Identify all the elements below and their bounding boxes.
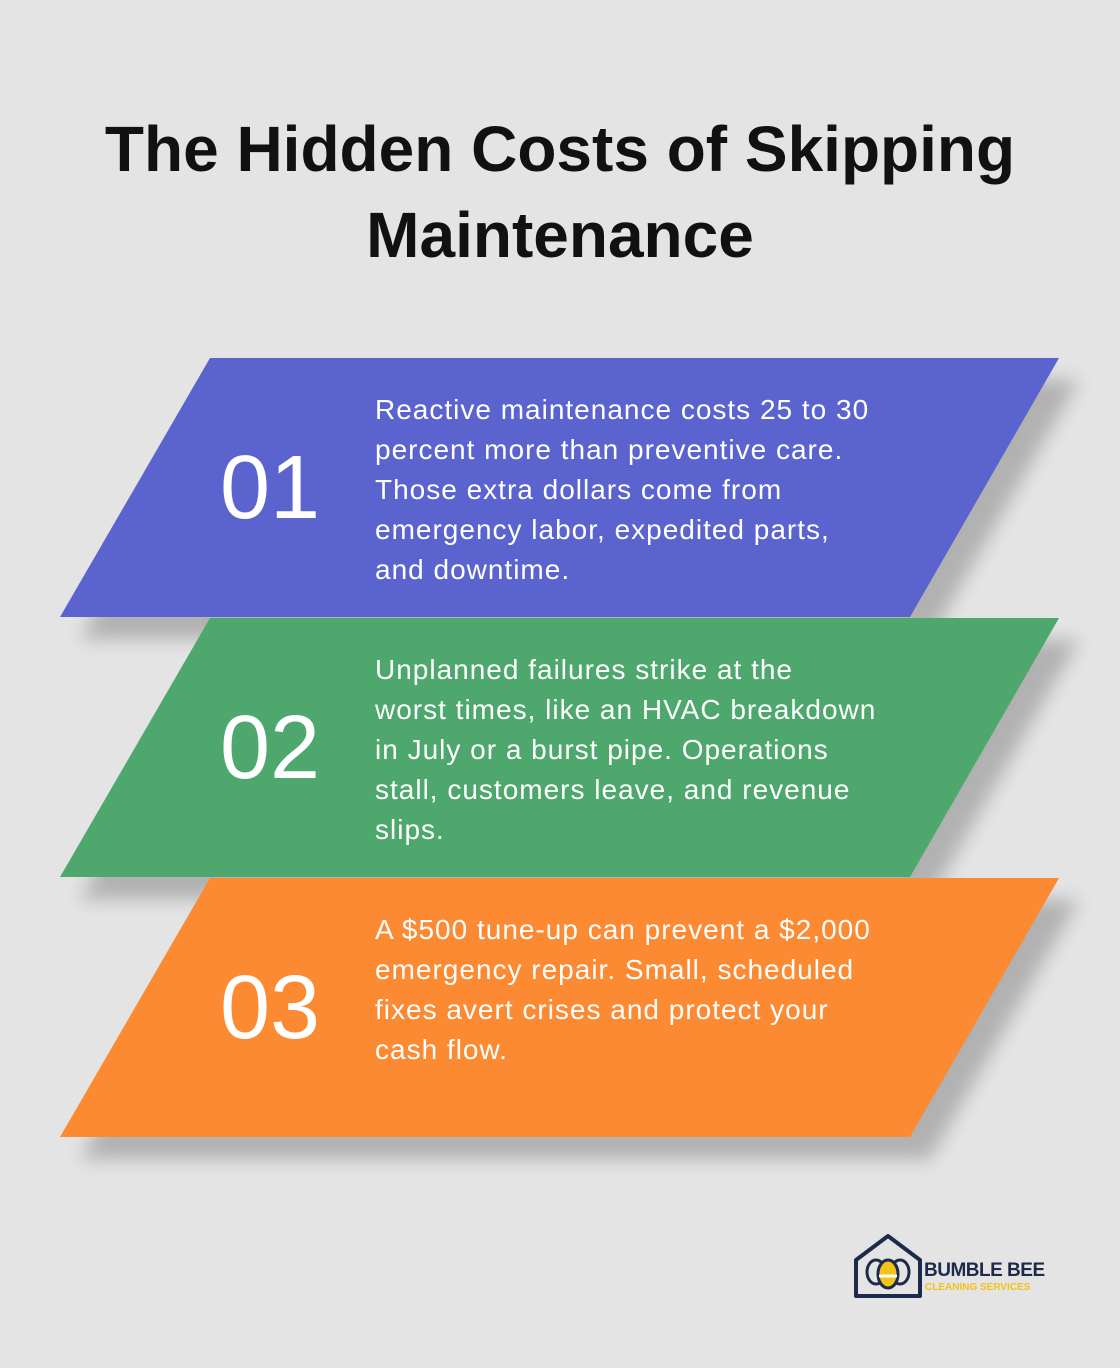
text 03: A $500 tune-up can prevent a $2,000 xyxy=(375,914,871,945)
text 03: fixes avert crises and protect your xyxy=(375,994,829,1025)
icon: bee house xyxy=(854,1234,922,1298)
text 03 xyxy=(375,914,871,1065)
text 03: emergency repair. Small, scheduled xyxy=(375,954,854,985)
title: Maintenance xyxy=(366,199,754,271)
panel: 02 xyxy=(60,618,1081,908)
text 02: slips. xyxy=(375,814,445,845)
text 01 xyxy=(375,394,869,585)
text 02: Unplanned failures strike at the xyxy=(375,654,793,685)
logo text: BUMBLE BEE xyxy=(924,1260,1045,1281)
text 01: emergency labor, expedited parts, xyxy=(375,514,830,545)
text 02 xyxy=(375,654,876,845)
text 01: and downtime. xyxy=(375,554,570,585)
logo: CLEANING SERVICES xyxy=(925,1282,1030,1293)
text 03: cash flow. xyxy=(375,1034,508,1065)
text 02: stall, customers leave, and revenue xyxy=(375,774,850,805)
title xyxy=(105,113,1015,271)
title: The Hidden Costs of Skipping xyxy=(105,113,1015,185)
panel: 01 xyxy=(60,358,1081,648)
number 01: 01 xyxy=(220,438,320,538)
text 02: worst times, like an HVAC breakdown xyxy=(375,694,876,725)
number 02: 02 xyxy=(220,698,320,798)
text 01: Those extra dollars come from xyxy=(375,474,782,505)
panel: 03 xyxy=(60,878,1081,1168)
text 01: percent more than preventive care. xyxy=(375,434,843,465)
text 02: in July or a burst pipe. Operations xyxy=(375,734,829,765)
text 01: Reactive maintenance costs 25 to 30 xyxy=(375,394,869,425)
number 03: 03 xyxy=(220,958,320,1058)
logo xyxy=(854,1234,1045,1298)
